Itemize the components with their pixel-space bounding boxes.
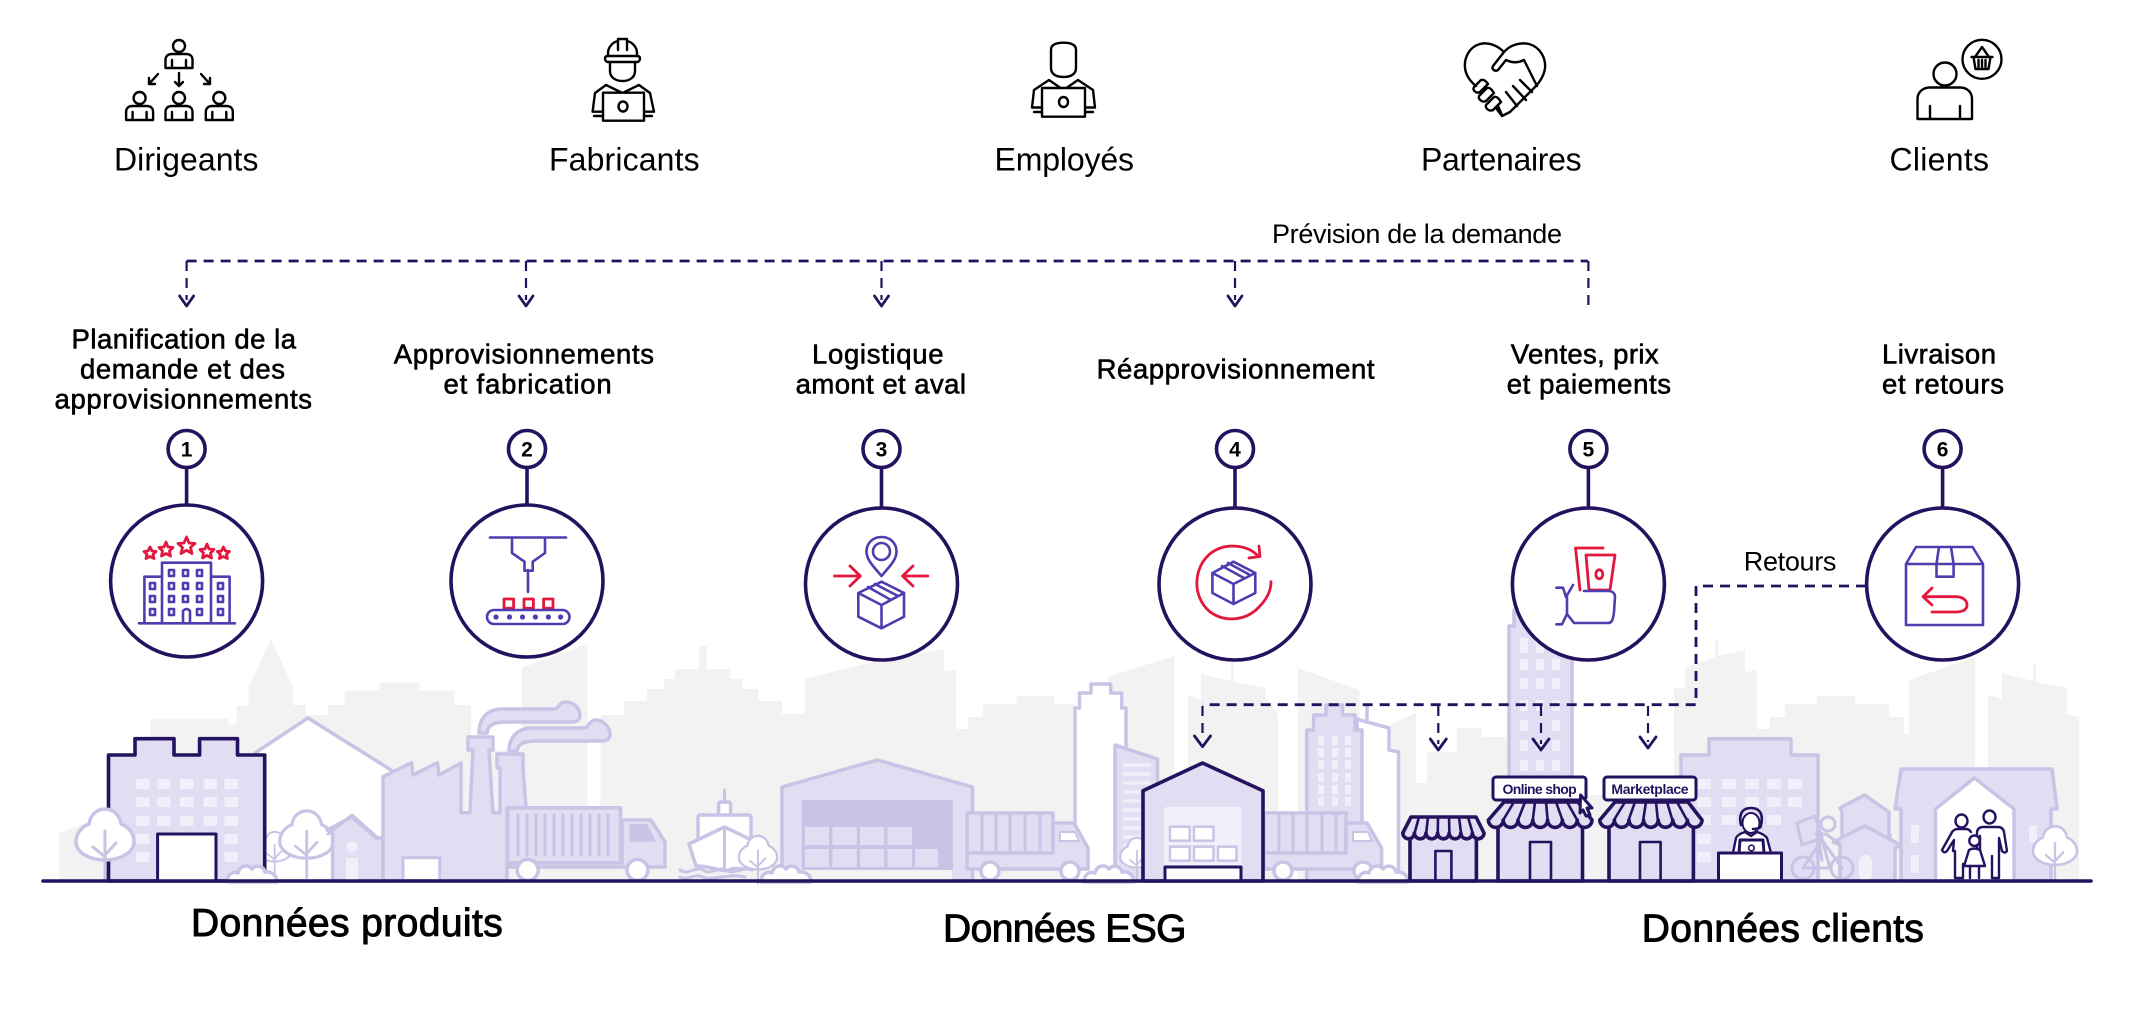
returns dashed connector [1194,586,1866,750]
delivery cyclist [1792,816,1853,879]
narrow striped building [1115,745,1158,881]
number badge: 3 [876,438,887,462]
top audience: Dirigeants [114,40,258,178]
icon: parcel return [1906,547,1983,625]
delivery truck with ribbed container [508,808,665,880]
step title: et fabrication [444,368,612,399]
small house [327,815,383,881]
dark main factory [108,739,265,881]
heading: customer data: Données clients [1642,908,1924,951]
trees behind small house [258,811,334,878]
step title: approvisionnements [54,383,312,414]
tree and bush by store [1084,838,1154,882]
family house [1895,769,2057,881]
top audience: Clients: Clients [1890,142,1989,178]
step title: demande et des [80,353,285,384]
step title: Approvisionnements [394,338,654,369]
marketplace store [1600,777,1702,881]
top audience: Fabricants [549,39,700,178]
step title: Planification de la [72,323,297,354]
bush by warehouse [761,866,811,882]
white house behind [255,718,391,881]
number badge: 6 [1937,438,1948,462]
step title: et retours [1882,368,2004,399]
ground line [43,879,2091,883]
step title: Ventes, prix [1511,338,1659,369]
icon: executives hierarchy [126,40,233,120]
production plant [383,702,610,881]
heading: ESG data: Données ESG [943,908,1186,951]
purple apartment block [1681,739,1818,881]
icon: replenishment cycle [1197,546,1271,619]
top audience: Dirigeants: Dirigeants [114,142,258,178]
stores and customers scene [1403,610,2077,881]
step title: amont et aval [796,368,966,399]
second box truck [1264,813,1408,882]
number badge: 4 [1229,438,1241,462]
number badge [1924,430,1961,468]
online shop store [1488,777,1592,881]
step title: Réapprovisionnement [1097,353,1375,384]
small houses behind cyclist [1833,795,1901,881]
step 6 [1194,338,2019,750]
icon: conveyor and press [487,538,570,624]
small store [1403,817,1484,881]
top audience: Partenaires [1421,43,1582,178]
icon: handshake heart [1465,43,1545,116]
number badge [508,430,546,468]
step title [1882,338,2004,399]
factory with logistics: product data scene [76,702,665,882]
tree by ship [739,836,777,883]
step title: Livraison [1882,338,1996,369]
number badge: 5 [1583,438,1595,462]
box truck [967,813,1088,880]
bush [227,866,277,882]
step 2 [394,338,654,657]
port and warehouse scene [680,684,1408,883]
dark warehouse [1143,763,1263,881]
top audience: Partenaires: Partenaires [1421,142,1582,178]
step 5 [1507,338,1671,660]
sign: marketplace: Marketplace [1611,781,1689,797]
icon: manufacturer with hard hat [593,39,654,121]
dashed demand forecast connector [180,261,1588,307]
top audience: Fabricants: Fabricants [549,142,700,178]
step title [796,338,966,399]
tall purple tower behind stores [1509,610,1572,881]
step title [54,323,312,414]
distribution warehouse [782,760,972,881]
top audience: Employés: Employés [994,142,1134,178]
step 1 [54,323,312,657]
label: returns: Retours [1744,547,1836,577]
number badge: 1 [181,438,193,462]
number badge [1216,430,1254,468]
heading: product data: Données produits [191,902,503,945]
purple tower [1307,705,1362,881]
step title: Logistique [812,338,944,369]
icon: customer with basket [1918,40,2002,119]
number badge [168,430,205,468]
number badge: 2 [521,438,533,462]
top audience: Employés [994,43,1134,178]
number badge [863,430,900,468]
customer service agent [1718,808,1782,881]
icon: location pin and parcel [834,537,928,628]
tree by family house [2033,826,2077,881]
white building right [1357,705,1398,881]
icon: hand holding payment [1556,548,1615,624]
sign: online shop: Online shop [1502,781,1577,797]
step title: et paiements [1507,368,1671,399]
step 3 [796,338,966,660]
number badge [1570,430,1607,468]
step title [1507,338,1671,399]
ship [680,790,760,878]
skyline background [59,620,2079,881]
white tower [1075,684,1126,881]
label: demand forecast: Prévision de la demande [1272,219,1562,249]
step 4 [1097,353,1375,660]
cursor [1580,795,1592,816]
tree by factory [76,809,134,881]
step title [394,338,654,399]
icon: hotel with stars [139,537,235,623]
top audience: Clients [1890,40,2002,178]
family [1942,810,2007,878]
icon: employee with laptop [1032,43,1095,117]
